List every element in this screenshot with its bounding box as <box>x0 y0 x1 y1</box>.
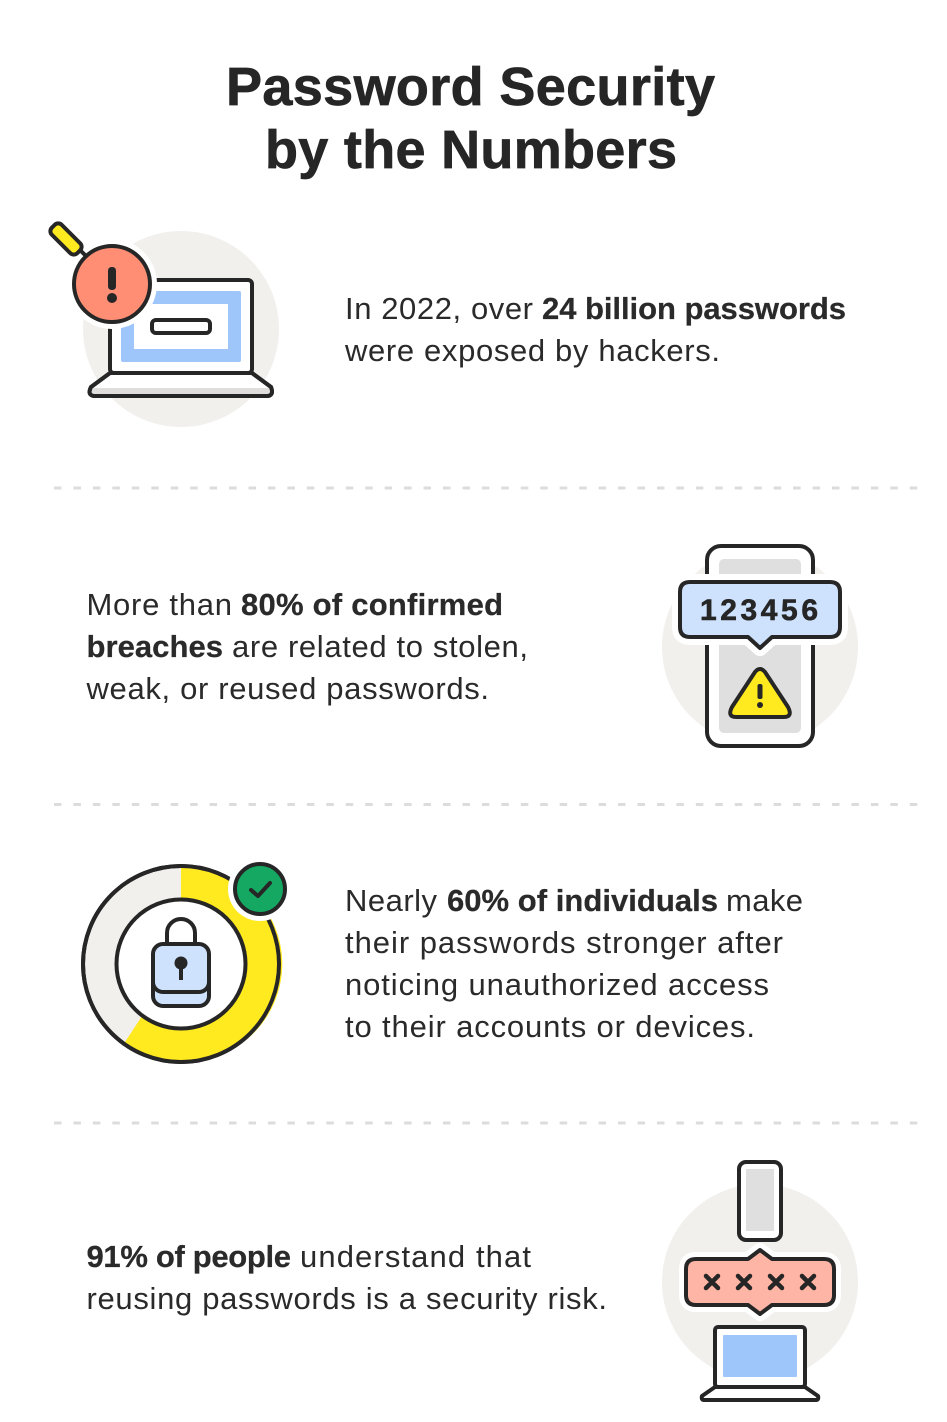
icon: phone with weak password bubble <box>662 546 858 746</box>
text: 24 billion passwords <box>344 291 846 368</box>
text: 91% of people <box>86 1239 607 1316</box>
title: by the Numbers <box>265 120 677 180</box>
divider <box>54 1122 918 1124</box>
text: 91% of people: 91% of people <box>86 1239 291 1274</box>
text: 24 billion passwords: In 2022, over <box>345 291 533 326</box>
icon: laptop with alert magnifier <box>48 221 279 427</box>
title: Password Security <box>226 57 715 117</box>
text: 80% of confirmed breaches <box>86 587 528 706</box>
text: 24 billion passwords: 24 billion passwords <box>542 291 846 326</box>
text: 60% of individuals: to their accounts or devices. <box>345 1009 755 1044</box>
text: 60% of individuals: their passwords stronger after <box>345 925 783 960</box>
text: 80% of confirmed breaches: 80% of confirmed <box>241 587 503 622</box>
text: 80% of confirmed breaches: More than <box>86 587 232 622</box>
icon: 60 percent ring with padlock <box>83 857 292 1062</box>
text: 80% of confirmed breaches: are related to stolen, <box>232 629 528 664</box>
text: 91% of people: reusing passwords is a security risk. <box>86 1281 607 1316</box>
text: 80% of confirmed breaches: breaches <box>86 629 223 664</box>
icon: phone with weak password bubble: 123456 <box>700 594 818 627</box>
text: 60% of individuals: make <box>726 883 803 918</box>
divider <box>54 803 918 806</box>
text: 80% of confirmed breaches: weak, or reused passwords. <box>86 671 489 706</box>
icon: reused password between phone and laptop <box>662 1162 858 1400</box>
text: 60% of individuals: 60% of individuals <box>447 883 718 918</box>
text: 91% of people: understand that <box>300 1239 531 1274</box>
text: 60% of individuals <box>345 883 803 1044</box>
title <box>226 57 715 180</box>
text: 24 billion passwords: were exposed by hackers. <box>344 333 720 368</box>
divider <box>54 486 918 490</box>
text: 60% of individuals: Nearly <box>345 883 438 918</box>
text: 60% of individuals: noticing unauthorized access <box>345 967 769 1002</box>
